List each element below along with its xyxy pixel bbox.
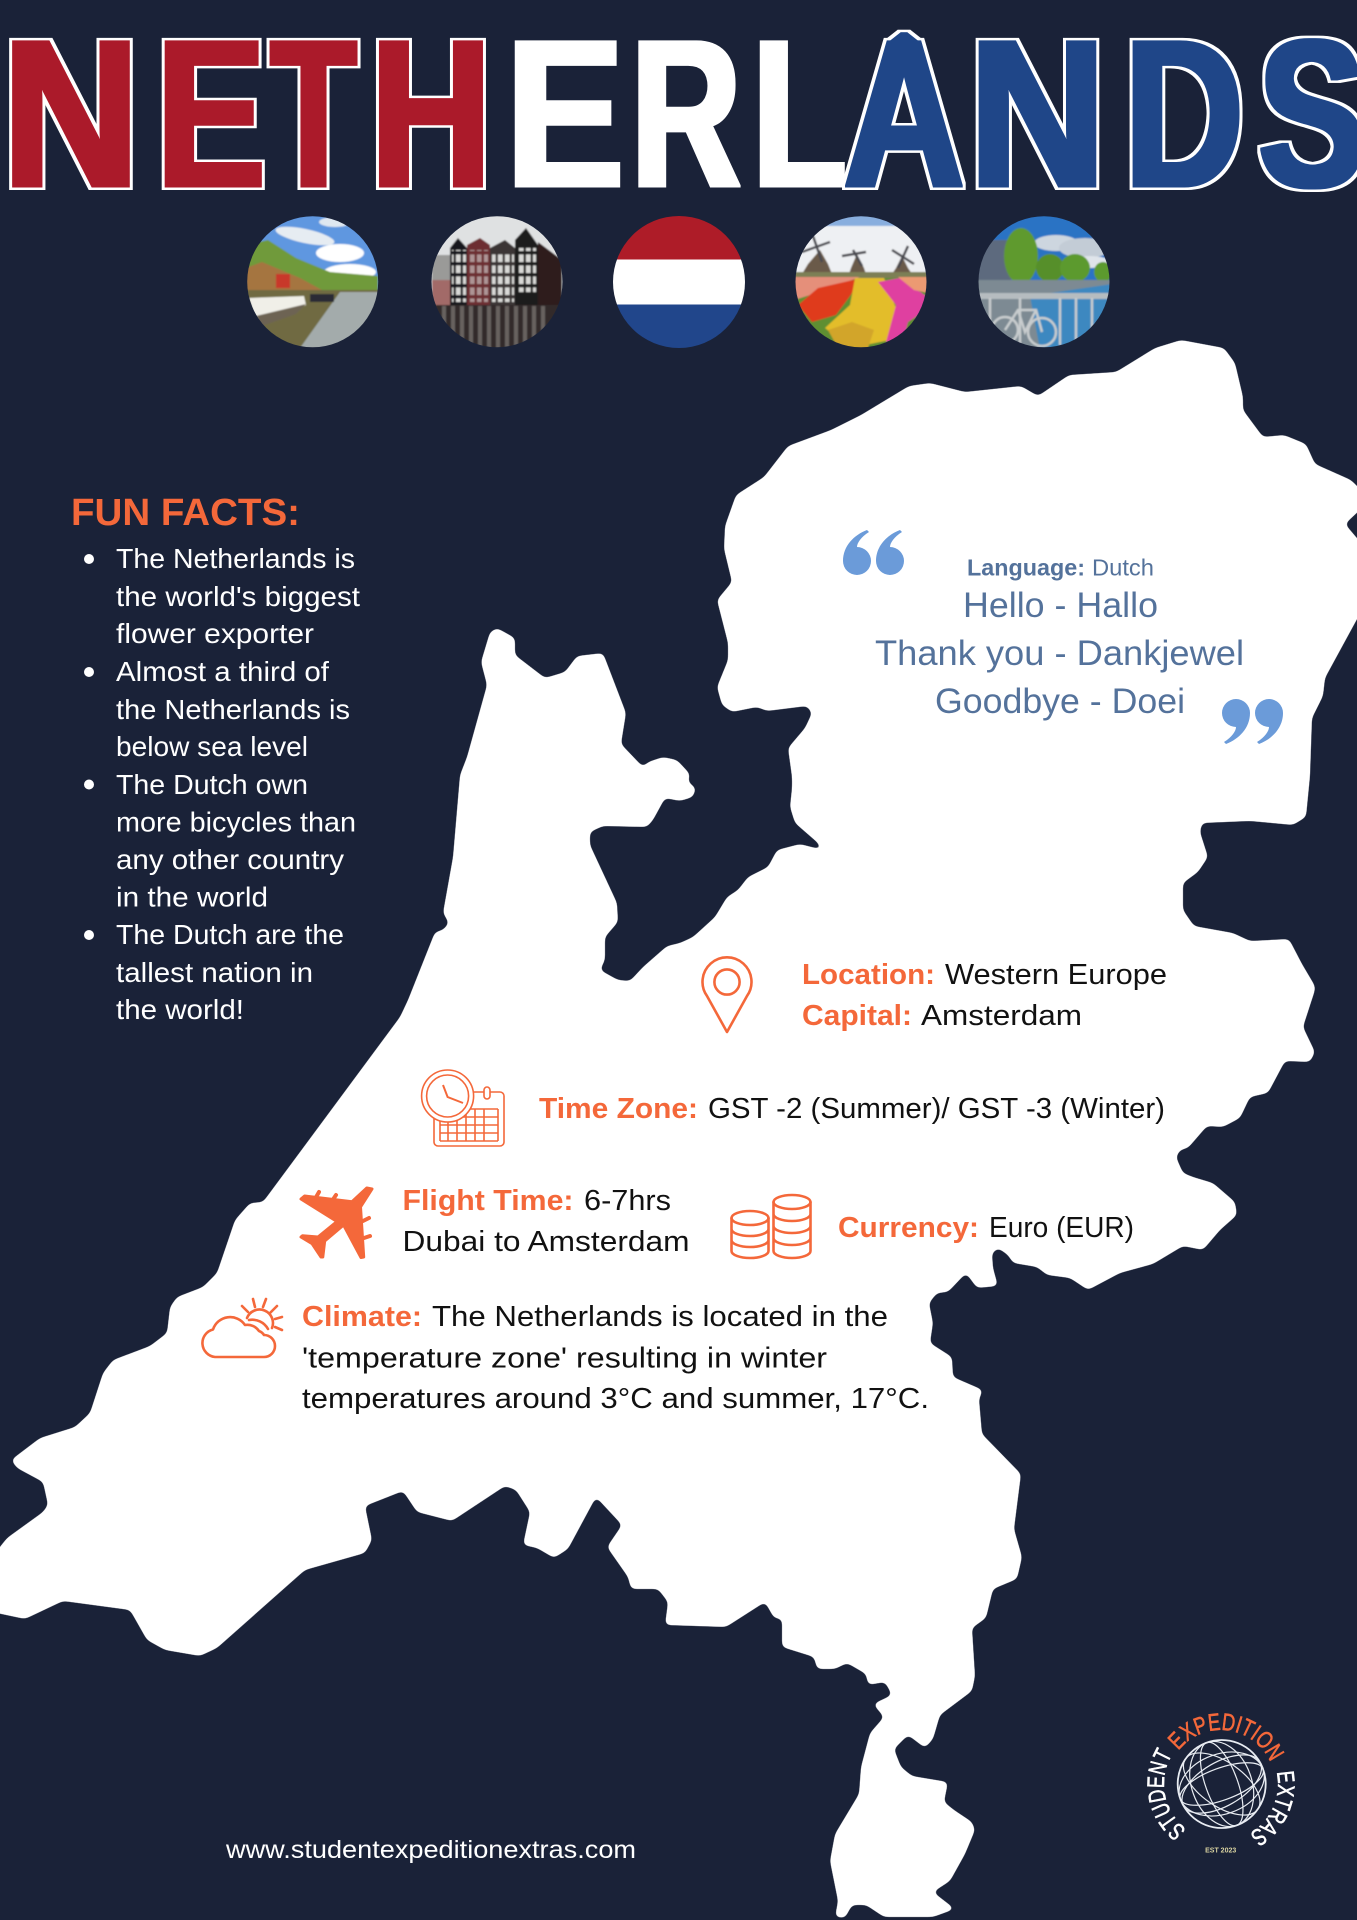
fact list text: more bicycles than [116,806,356,838]
title: NETHERLANDS: N [969,0,1106,232]
currency: Euro (EUR) [989,1212,1134,1244]
logo arc text: EXPEDITION [1167,1713,1284,1762]
fact list text: the Netherlands is [116,694,350,725]
fact list text: the world's biggest [116,581,360,612]
climate [302,1301,929,1415]
icon: closing quote mark [1222,699,1283,744]
icon: location pin [703,957,752,1032]
logo: student expedition extras: EXTRAS [1252,1771,1295,1846]
fact list text: the world! [116,994,244,1025]
time zone: Time Zone: [539,1093,698,1125]
logo globe [1170,1732,1273,1836]
icon: coin stacks [732,1195,810,1258]
climate: Climate: [302,1301,422,1333]
title: NETHERLANDS: N [2,0,140,232]
climate: temperatures around 3°C and summer, 17°C. [302,1383,929,1415]
language phrases: Goodbye - Doei [935,682,1185,721]
fact list text: flower exporter [116,618,314,649]
website url: www.studentexpeditionextras.com [225,1836,636,1864]
fact list text: Almost a third of [116,656,329,687]
location and capital: Capital: [802,1000,912,1032]
fact list text: tallest nation in [116,957,313,988]
flight time: Dubai to Amsterdam [402,1226,690,1258]
location and capital: Western Europe [945,959,1167,991]
icon: airplane [301,1188,372,1258]
fact list text: in the world [116,882,268,912]
time zone: GST -2 (Summer)/ GST -3 (Winter) [708,1093,1165,1125]
currency [838,1212,1134,1244]
title: NETHERLANDS [2,0,1357,232]
fact list text: The Dutch are the [116,919,344,950]
photo: canal with boats [245,214,381,352]
photo: windmills and tulips [794,214,929,351]
bullets [84,554,94,940]
logo: student expedition extras [1147,1713,1295,1854]
title: NETHERLANDS: A [844,0,964,232]
location and capital: Amsterdam [921,1000,1082,1032]
location and capital: Location: [802,959,935,991]
title: NETHERLANDS: R [631,0,741,231]
icon: cloud and sun [202,1299,282,1357]
language phrases [875,554,1244,721]
logo: student expedition extras: STUDENT [1147,1746,1184,1840]
title: NETHERLANDS: E [506,0,624,232]
language phrases: Hello - Hallo [963,586,1158,625]
heading: fun facts: FUN FACTS: [71,492,300,534]
panel: fun facts [71,492,360,1025]
location and capital [802,959,1167,1032]
fact list text: any other country [116,844,344,875]
language phrases: Language: [967,554,1085,580]
title: NETHERLANDS: T [271,0,356,231]
fact list text: The Netherlands is [116,543,355,574]
icon: clock and calendar [422,1070,504,1146]
fact list text: The Dutch own [116,769,308,800]
title: NETHERLANDS: D [1125,0,1243,232]
title: NETHERLANDS: H [371,0,491,232]
logo established year: EST 2023 [1205,1848,1236,1854]
title: NETHERLANDS: E [157,0,265,231]
icon: opening quote mark [843,530,904,575]
language phrases: Thank you - Dankjewel [875,634,1244,673]
climate: 'temperature zone' resulting in winter [302,1342,827,1374]
flight time: Flight Time: [402,1185,574,1217]
language phrases: Dutch [1092,554,1154,580]
flight time: 6-7hrs [584,1185,671,1217]
climate: The Netherlands is located in the [432,1301,888,1333]
fact list text: below sea level [116,731,308,762]
photo: canal houses [430,214,565,350]
currency: Currency: [838,1212,979,1244]
flag of the Netherlands [610,214,750,350]
flight time [402,1185,690,1258]
fact list text [116,543,360,1025]
photo: bicycle on canal bridge [977,214,1112,350]
title: NETHERLANDS: L [752,0,847,232]
